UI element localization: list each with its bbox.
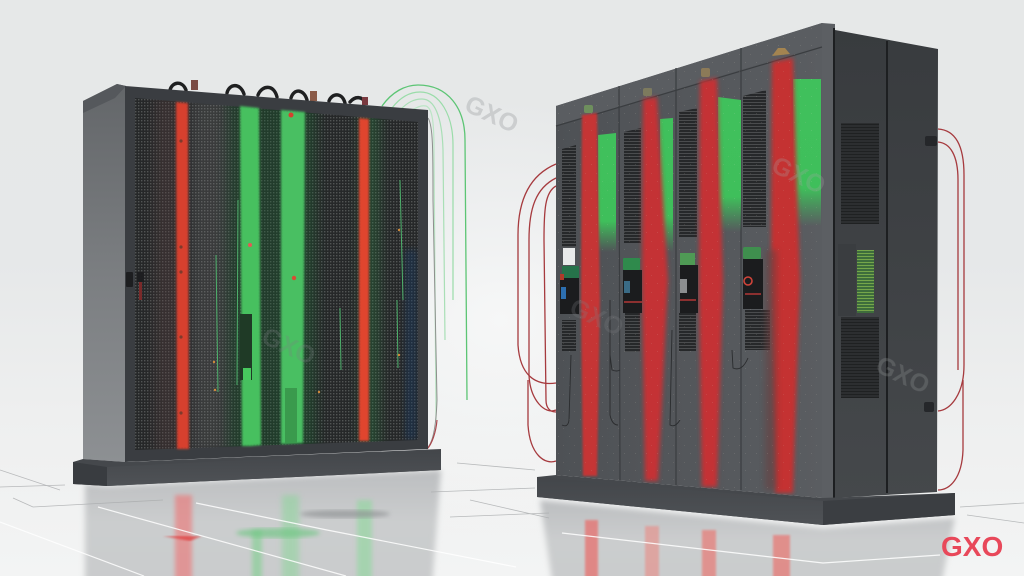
watermark: GXO: GXO: [871, 351, 934, 400]
module 2: [623, 258, 642, 313]
side panels: [822, 23, 938, 498]
watermark: GXO: [257, 90, 934, 400]
reflection: left cabinet: [85, 470, 441, 576]
red stripes: [558, 28, 817, 497]
plinth: [537, 475, 955, 525]
front panel: [556, 23, 822, 498]
red cables, left side: [518, 164, 556, 462]
module 3: [680, 253, 698, 313]
watermark: GXO: GXO: [460, 90, 523, 139]
hanging cable loops: [562, 300, 748, 426]
front frame: [125, 86, 428, 462]
floor reflections: [0, 463, 1024, 576]
right cabinet: [518, 0, 964, 525]
door handle: [126, 272, 144, 300]
red cables, right side: [938, 129, 964, 490]
watermark: GXO: GXO: [565, 293, 628, 342]
red stripe 2: [359, 118, 369, 441]
reflection: right cabinet: [540, 500, 955, 576]
cable bundle on top: [170, 80, 368, 105]
status markers and lines: [179, 112, 403, 443]
module 4: [743, 247, 763, 309]
mesh screen: [126, 95, 420, 455]
logo: GXO: GXO: [941, 531, 1003, 562]
top lamps: [584, 48, 790, 113]
watermark: GXO: GXO: [767, 151, 830, 200]
side panel: [83, 84, 126, 462]
control modules: [560, 247, 763, 314]
module 1: [560, 248, 579, 314]
floor joint lines: [0, 503, 940, 576]
green stripe 1: [240, 106, 261, 446]
side vents: [841, 123, 879, 224]
vents: [562, 90, 770, 352]
green stripe 2: [281, 110, 305, 444]
watermark: GXO: GXO: [257, 322, 320, 371]
red stripe 1: [176, 102, 189, 449]
cabinet dividers: [556, 47, 822, 490]
green cable arcs behind left cabinet: [382, 85, 467, 449]
green panels: [598, 79, 821, 252]
plinth: [73, 449, 441, 486]
